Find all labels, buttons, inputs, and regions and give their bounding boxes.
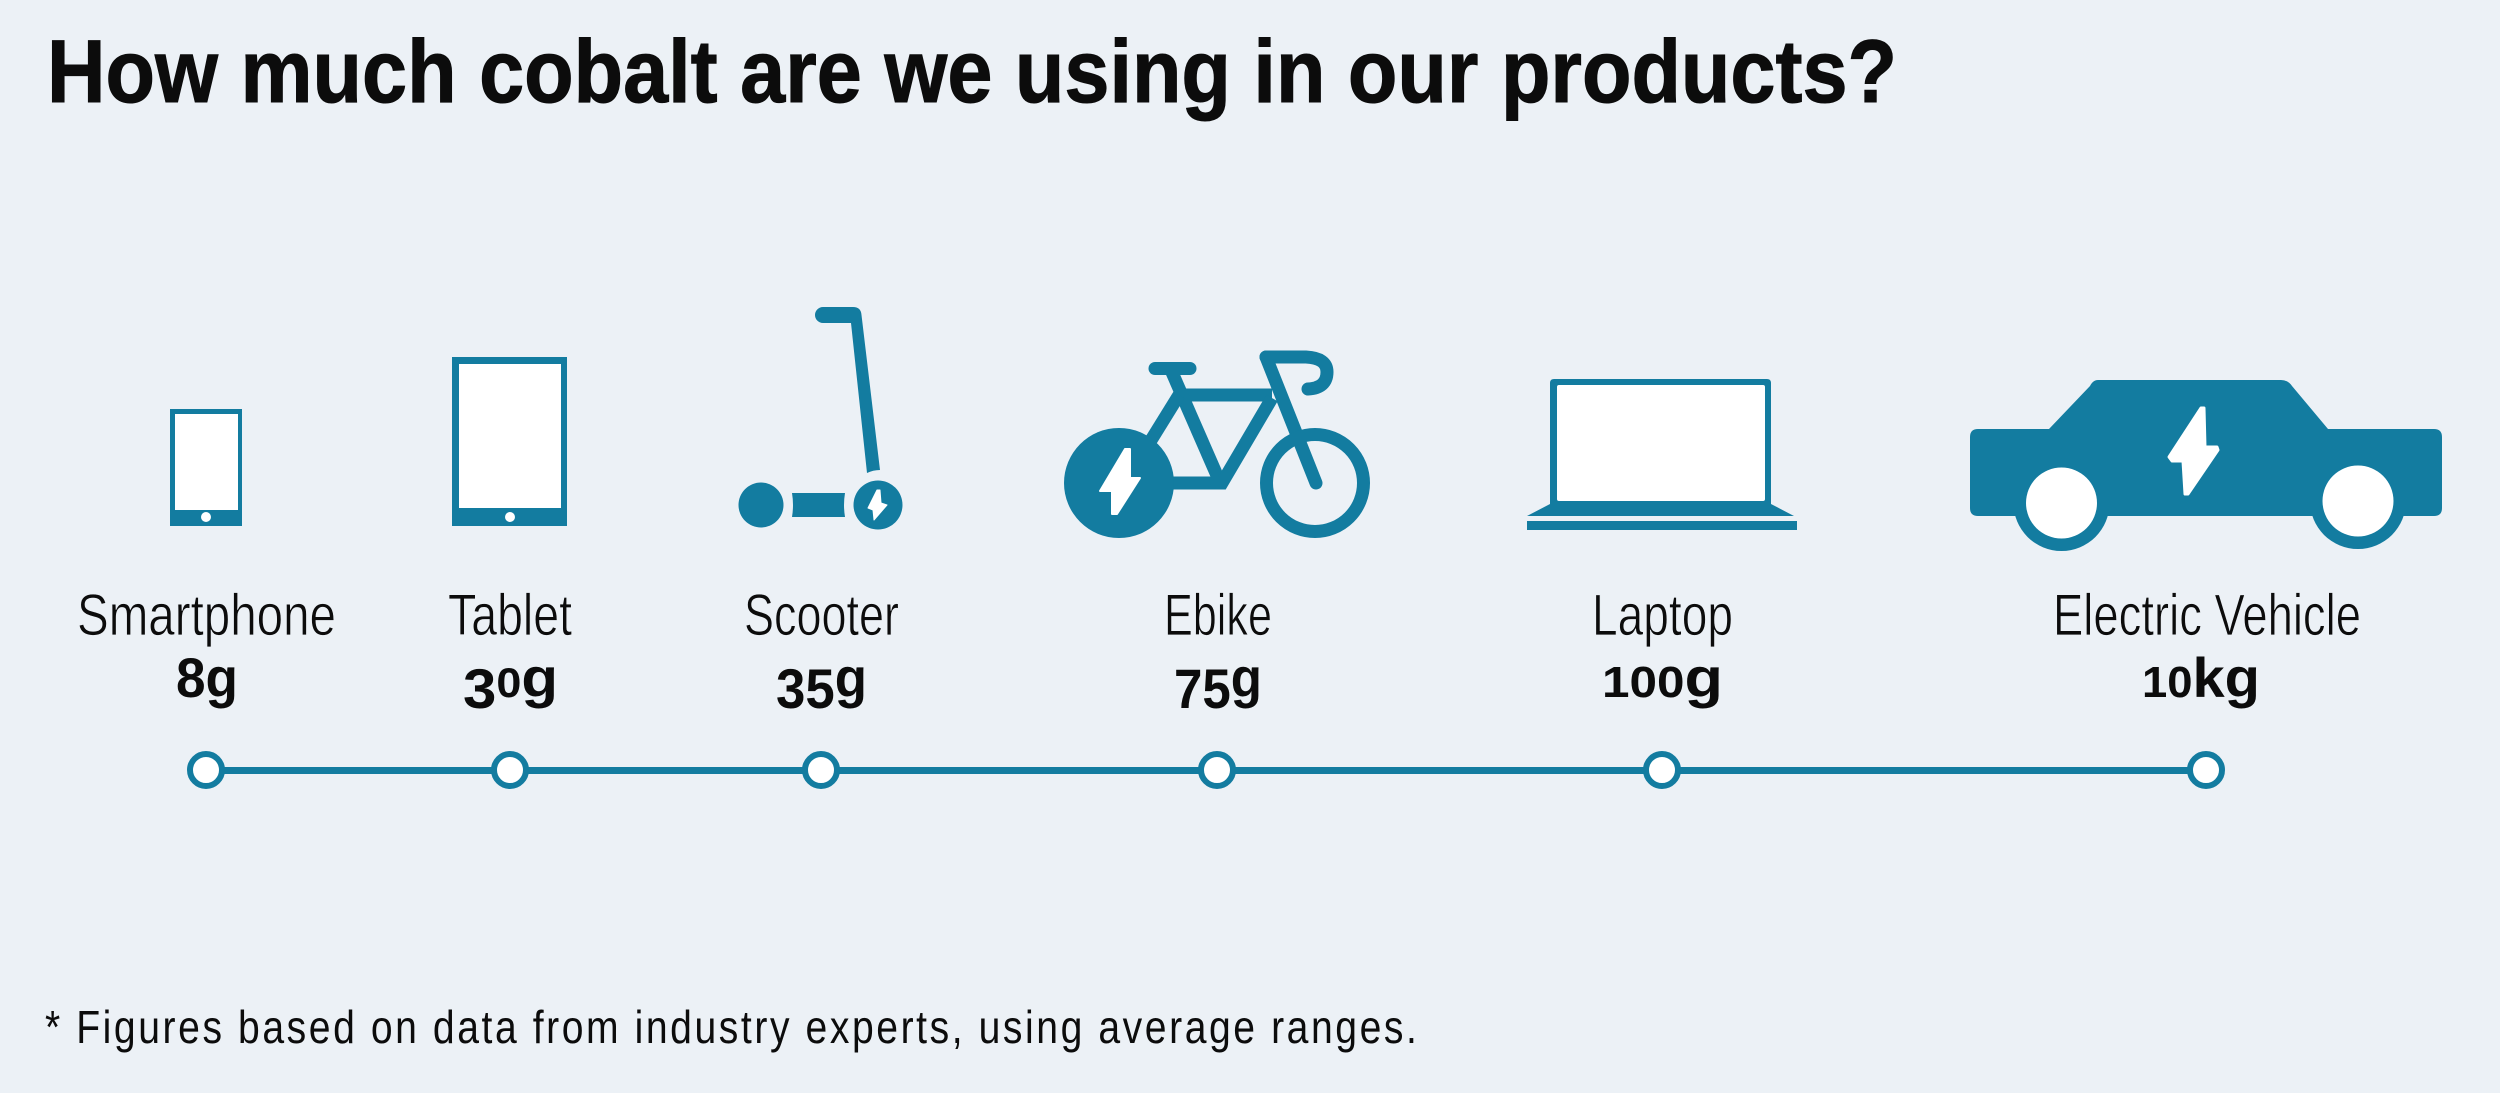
label: Scooter 35g bbox=[744, 583, 899, 720]
icon: electric car bbox=[1970, 380, 2442, 551]
label: Scooter 35g: 35 bbox=[776, 657, 835, 720]
label: Tablet 30g bbox=[448, 583, 572, 720]
label: Laptop 100g: 100g bbox=[1602, 646, 1723, 709]
icon: scooter bbox=[738, 307, 902, 530]
label: Ebike 75g: Ebike bbox=[1164, 583, 1272, 648]
label: Laptop 100g bbox=[1592, 583, 1733, 709]
label: Ebike 75g: 75 bbox=[1174, 657, 1231, 720]
icon: laptop bbox=[1527, 379, 1797, 530]
label: Scooter 35g: g bbox=[835, 646, 867, 709]
label: Electric Vehicle 10kg: 10kg bbox=[2142, 646, 2260, 709]
label: Electric Vehicle 10kg: Electric Vehicle bbox=[2053, 583, 2361, 648]
footnote: * Figures based on data from industry experts, using average ranges. bbox=[45, 1002, 1417, 1054]
icon: tablet bbox=[452, 357, 567, 526]
label: Smartphone 8g: 8g bbox=[176, 646, 238, 709]
label: Tablet 30g: 0 bbox=[496, 659, 521, 706]
title: How much cobalt are we using in our products? bbox=[47, 21, 1897, 121]
label: Ebike 75g: g bbox=[1231, 646, 1262, 709]
label: Tablet 30g: g bbox=[521, 646, 558, 709]
label: Ebike 75g bbox=[1164, 583, 1272, 720]
icon: smartphone bbox=[170, 409, 242, 526]
timeline bbox=[190, 754, 2222, 786]
label: Smartphone 8g: Smartphone bbox=[77, 583, 336, 648]
label: Tablet 30g: Tablet bbox=[448, 583, 572, 648]
icon: ebike bbox=[1064, 357, 1364, 538]
label: Tablet 30g: 3 bbox=[463, 657, 496, 720]
label: Electric Vehicle 10kg bbox=[2053, 583, 2361, 709]
label: Smartphone 8g bbox=[77, 583, 336, 709]
label: Scooter 35g: Scooter bbox=[744, 583, 899, 648]
label: Laptop 100g: Laptop bbox=[1592, 583, 1733, 648]
